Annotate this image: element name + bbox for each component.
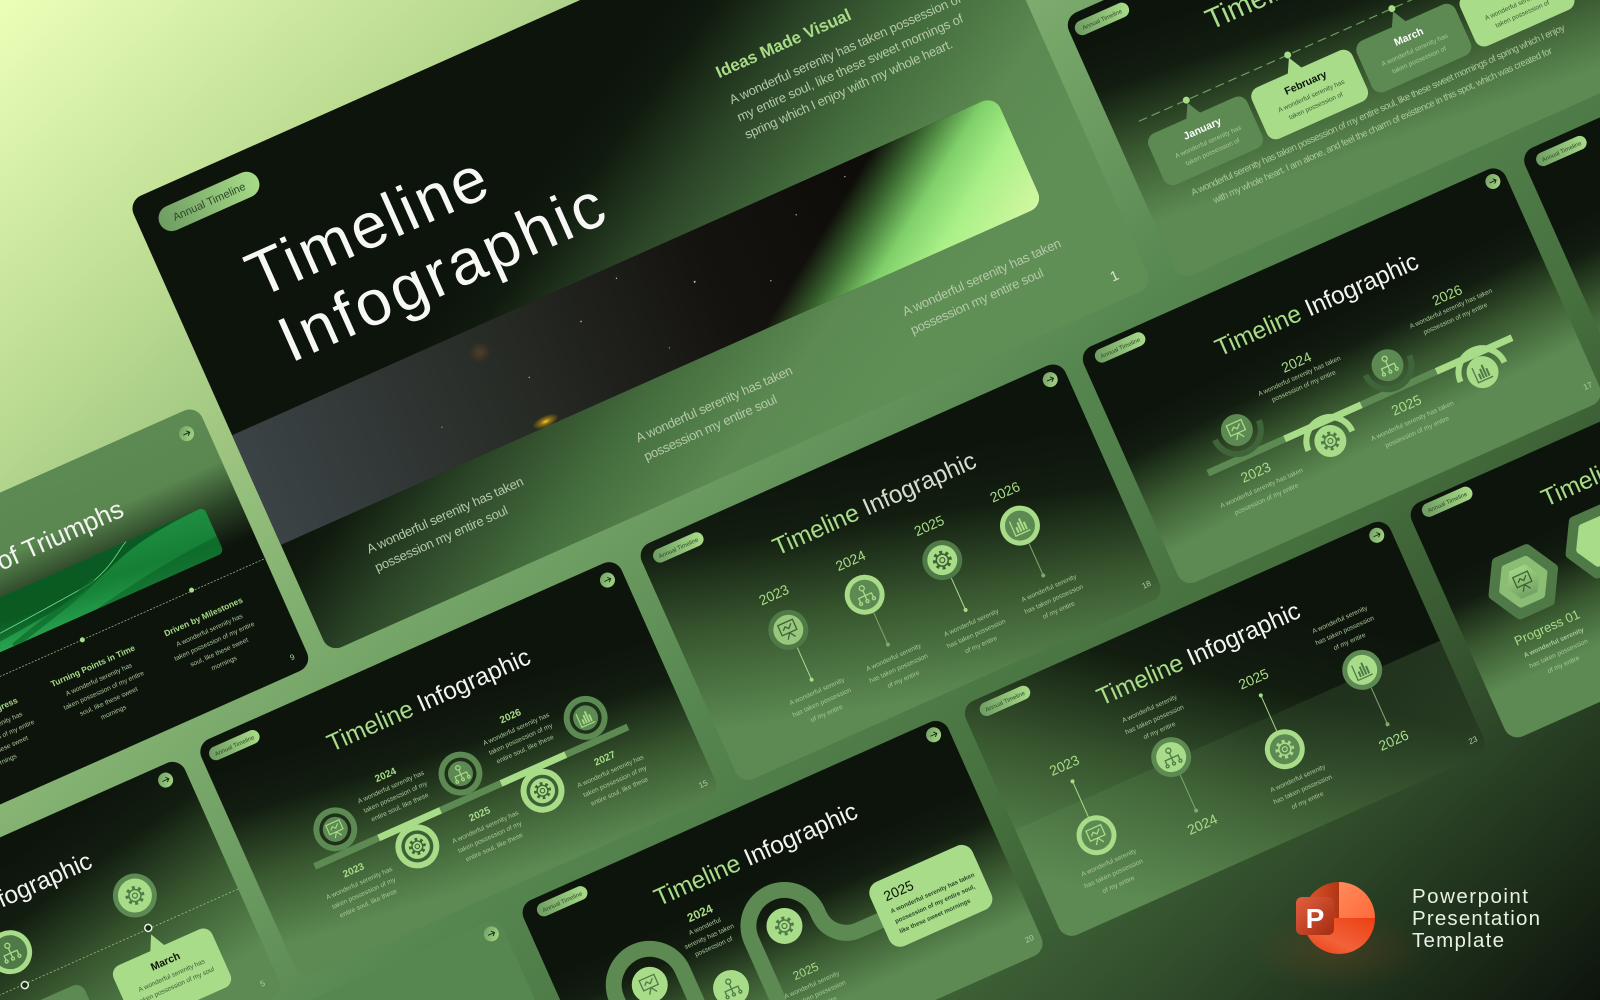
icon: org (707, 964, 755, 1000)
paragraph: A wonderful serenity has taken possession of my entire soul, like these sweet mornings of spring which I enjoy (1190, 22, 1567, 199)
text 2025: A wonderful serenity (943, 608, 1001, 639)
title: Timeline Infographic (650, 798, 862, 912)
arrow button (156, 770, 176, 790)
icon circle gear (106, 867, 164, 925)
milestone 2023 (306, 800, 364, 858)
text 2023: has taken possession (1083, 858, 1144, 890)
milestone 2024 arch (1299, 409, 1359, 465)
text 2024: of my entire (886, 669, 921, 690)
page number: 15 (697, 778, 710, 790)
label 2024: 2024 (685, 901, 715, 925)
panel: row three left slide (76, 917, 602, 1000)
label 2025: taken possession of my (457, 820, 524, 855)
card: previous month (0, 982, 107, 1000)
pill (207, 728, 262, 762)
template caption: Presentation (1412, 907, 1540, 930)
arrow button (177, 424, 196, 444)
label 2023 (1210, 447, 1309, 521)
template caption: Template (1412, 929, 1504, 952)
callout card 2025: like these sweet mornings (898, 897, 972, 935)
page number: 9 (289, 652, 297, 662)
card: January: January (1182, 115, 1223, 143)
node 2025: 2025 (1236, 665, 1271, 692)
panel: far right slide (1520, 0, 1600, 389)
text 2026: of my entire (1042, 600, 1076, 621)
ideas paragraph: spring which I enjoy with my whole heart. (742, 36, 955, 142)
second hexagon (1560, 502, 1600, 579)
text 2024: has taken possession (1124, 704, 1185, 736)
text 2023 (1079, 847, 1149, 901)
winding track (602, 852, 930, 1000)
page number: 18 (1141, 579, 1153, 591)
text 2025 (941, 607, 1012, 661)
panel: slide 20 winding path (518, 716, 1049, 1000)
node 2024: 2024 (1185, 811, 1220, 838)
card: March (1347, 0, 1475, 96)
panel: progress slide (1406, 320, 1600, 742)
caption 2: possession my entire soul (641, 391, 779, 464)
label 2027: entire soul, like these (590, 776, 650, 808)
node 2023 (751, 580, 830, 690)
text 2024 (863, 642, 934, 696)
text 2026 (1310, 604, 1381, 658)
category pill: Annual Timeline (171, 181, 248, 224)
main title: Infographic (267, 168, 615, 376)
dashed line (1137, 0, 1586, 124)
arrow button (598, 570, 617, 590)
column: milestones (161, 594, 266, 685)
node 2023: 2023 (1047, 752, 1082, 779)
node 2024 (1145, 731, 1223, 840)
arrow button (1483, 172, 1503, 191)
progress text: A wonderful serenity (1523, 627, 1585, 659)
lighter lower band (1015, 641, 1489, 940)
pill (535, 884, 590, 919)
page number: 5 (259, 979, 267, 989)
node 2026 (1336, 643, 1415, 756)
text 2026: A wonderful serenity (1021, 573, 1078, 604)
column: turning points: A wonderful serenity has (65, 662, 134, 698)
text 2024: has taken possession (868, 653, 929, 685)
pill: Annual Timeline (542, 891, 584, 914)
title: Timeline Infographic (1211, 248, 1423, 362)
main title: Timeline (235, 141, 498, 311)
arrow button (924, 725, 943, 745)
caption 1: possession my entire soul (372, 502, 510, 575)
dashed timeline (0, 885, 240, 1000)
column: turning points: Turning Points in Time (49, 643, 137, 689)
panel: slide 5 months (0, 757, 285, 1000)
text 2023: has taken possession (792, 687, 853, 719)
text 2024 (1119, 693, 1190, 747)
panel: slide 9 triumphs (0, 410, 308, 804)
card: February: February (1283, 68, 1329, 98)
progress text (1523, 627, 1595, 681)
text 2025: A wonderful serenity (1269, 763, 1327, 794)
label 2024: serenity has taken (684, 923, 736, 951)
label 2023: taken possession of my (331, 876, 398, 911)
text 2023 (787, 676, 858, 730)
label 2024: 2024 (1279, 348, 1314, 376)
caption 3: A wonderful serenity has taken (900, 235, 1063, 319)
milestone 2026 arch (1451, 340, 1511, 397)
milestone 2025 bowl (1359, 341, 1419, 397)
node 2026: 2026 (987, 478, 1023, 505)
caption 3: possession my entire soul (908, 265, 1046, 337)
ideas heading: Ideas Made Visual (713, 5, 854, 82)
label 2024: A wonderful serenity has taken (1257, 355, 1342, 398)
pill (1420, 484, 1475, 519)
column: turning points (49, 643, 157, 735)
milestone 2025 (431, 745, 490, 803)
label 2026: possession of my entire (1423, 302, 1489, 336)
card: February: taken possession of (1288, 91, 1344, 121)
label 2027: 2027 (593, 749, 618, 769)
dotted timeline (0, 555, 266, 746)
column: milestones: soul, like these sweet (189, 637, 250, 669)
label 2025: entire soul, like these (465, 832, 525, 863)
label 2026: entire soul, like these (496, 734, 555, 765)
progress text: has taken possession (1528, 638, 1589, 670)
icon: PowerPoint logo (1296, 882, 1375, 954)
pill (651, 530, 706, 565)
card: March: A wonderful serenity has (138, 958, 207, 994)
pill: Annual Timeline (985, 691, 1027, 714)
label 2027: A wonderful serenity has (576, 754, 646, 790)
pill (1093, 330, 1148, 365)
text 2026: A wonderful serenity (1312, 605, 1369, 635)
panel: slide 18 stems timeline (636, 360, 1165, 784)
pill (1072, 0, 1132, 38)
card: February: A wonderful serenity has (1277, 78, 1346, 114)
node 2025 (1232, 663, 1311, 776)
label 2025: A wonderful serenity (783, 970, 841, 1000)
label 2025: A wonderful serenity has taken (1370, 400, 1455, 443)
label 2025: A wonderful serenity has (451, 809, 520, 845)
milestone 2027 (557, 689, 615, 747)
label 2023: 2023 (1238, 458, 1273, 486)
node 2026 (983, 476, 1061, 586)
callout card 2025: 2025 (881, 877, 916, 904)
label 2026 (1401, 270, 1498, 340)
card: March (104, 912, 234, 1000)
label 2023: A wonderful serenity has taken (1219, 467, 1305, 510)
label 2027: taken possession of my (582, 764, 649, 799)
label 2026: 2026 (498, 707, 523, 726)
callout card 2025: possession of my entire soul, (894, 883, 977, 925)
icon circle org (0, 923, 39, 981)
column: turning points: soul, like these sweet (79, 686, 139, 718)
label 2024: entire soul, like these (370, 792, 430, 823)
icon: board (626, 961, 674, 1000)
pill: Annual Timeline (658, 537, 700, 560)
label 2025 (774, 952, 852, 1000)
label 2024: possession of (694, 936, 734, 958)
column: milestones: taken possession of my entire (173, 621, 256, 663)
text 2024: of my entire (1142, 721, 1177, 741)
card: January: taken possession of (1185, 137, 1241, 167)
label 2026: 2026 (1430, 281, 1465, 309)
title: Timeline Infographic (323, 644, 535, 758)
node 2024: 2024 (833, 547, 868, 574)
text 2023: A wonderful serenity (1080, 848, 1138, 878)
text 2023: A wonderful serenity (789, 676, 846, 707)
text 2025: has taken possession (1273, 774, 1334, 806)
label 2026 (476, 697, 560, 767)
node 2025: 2025 (912, 512, 947, 539)
column: milestones: mornings (211, 655, 239, 672)
fabric image (0, 508, 222, 652)
title: Timeline Infographic (1093, 598, 1305, 712)
text 2024: A wonderful serenity (1121, 694, 1179, 724)
label 2025: 2025 (791, 959, 821, 983)
column: turning points: taken possession of my entire (63, 670, 146, 712)
node 2024 (828, 545, 906, 655)
page number: 20 (1024, 933, 1036, 945)
text 2025: of my entire (964, 635, 999, 655)
text 2023: of my entire (1102, 875, 1136, 895)
node 2026: 2026 (1376, 726, 1411, 754)
text 2023: of my entire (810, 704, 844, 724)
label 2026: A wonderful serenity has taken (1409, 287, 1494, 330)
label 2025: 2025 (467, 805, 493, 824)
label 2024 (672, 896, 740, 961)
hexagon icon (1483, 543, 1564, 620)
panel: slide 17 seesaw track (1078, 164, 1600, 588)
card: April (1456, 0, 1578, 50)
label 2024: A wonderful serenity has (357, 769, 426, 805)
card: March: March (1392, 25, 1425, 49)
icon: gear (761, 902, 808, 950)
card: January: A wonderful serenity has (1174, 124, 1243, 160)
label 2023: 2023 (341, 861, 367, 880)
pill: Annual Timeline (1100, 337, 1142, 360)
label 2023: entire soul, like these (339, 888, 398, 920)
text 2025: of my entire (1291, 790, 1325, 811)
label 2024 (1249, 338, 1347, 408)
photo band (218, 96, 1044, 552)
column: milestones: A wonderful serenity has (175, 613, 245, 649)
label 2024: A wonderful (688, 916, 723, 937)
title: Timeline Infographic (769, 447, 980, 561)
column: progress (0, 692, 46, 783)
callout card 2025 (865, 841, 996, 951)
arrow button (1367, 525, 1387, 545)
category pill (154, 168, 264, 235)
text 2026: has taken possession (1315, 615, 1376, 647)
label 2025: possession of my entire (1384, 415, 1451, 450)
label 2024 (351, 756, 435, 825)
segmented track (1206, 334, 1513, 476)
text 2024: A wonderful serenity (865, 642, 923, 673)
card: March: March (149, 950, 182, 974)
card: February (1242, 34, 1371, 142)
label 2024: 2024 (373, 766, 399, 785)
icon: PowerPoint logo: P (1306, 903, 1324, 934)
label 2025: 2025 (1389, 391, 1424, 419)
milestone 2024 (388, 817, 446, 875)
segmented track (313, 724, 629, 870)
arrow button (1040, 370, 1060, 390)
label 2026: taken possession of my (488, 722, 554, 757)
callout card 2025: A wonderful serenity has taken (890, 872, 976, 915)
text 2025: has taken possession (946, 618, 1007, 650)
page number: 23 (1467, 734, 1479, 746)
panel: months timeline slide (1063, 0, 1600, 280)
node 2025 (906, 511, 984, 620)
label 2024: possession of my entire (1271, 369, 1337, 404)
milestone 2023 bowl (1208, 406, 1269, 462)
card: March: taken possession of (1391, 45, 1447, 76)
text 2026: has taken possession (1024, 583, 1085, 616)
node 2023: 2023 (756, 581, 791, 608)
caption 1: A wonderful serenity has taken (364, 474, 526, 556)
label 2027 (570, 739, 655, 810)
ideas paragraph: my entire soul, like these sweet mornings of (735, 11, 966, 125)
orange glow (1248, 910, 1428, 990)
text 2026 (1019, 572, 1090, 627)
panel: main title slide (114, 0, 1153, 659)
panel: slide 23 alternating timeline (960, 517, 1489, 940)
pill: Annual Timeline (1082, 9, 1124, 32)
page number: 17 (1582, 380, 1594, 392)
text 2026: of my entire (1333, 632, 1367, 652)
paragraph: with my whole heart. I am alone, and feel the charm of existence in this spot, which was created for (1211, 46, 1554, 207)
pill (1534, 134, 1589, 168)
pill: Annual Timeline (214, 735, 256, 758)
label 2024: taken possession of my (363, 780, 429, 815)
panel: slide 15 five-year track (196, 558, 721, 980)
template caption (1412, 885, 1540, 952)
text 2025 (1268, 763, 1338, 817)
card: January (1139, 81, 1266, 188)
column: milestones: Driven by Milestones (162, 595, 244, 638)
main title (235, 102, 615, 377)
label 2025 (445, 795, 529, 865)
arrow button (481, 924, 501, 944)
label 2025 (1361, 380, 1460, 454)
label 2023 (319, 851, 403, 922)
page number: 1 (1108, 267, 1121, 284)
template caption: Powerpoint (1412, 885, 1528, 908)
progress heading: Progress 01 (1512, 606, 1582, 649)
label 2023: A wonderful serenity has (325, 866, 394, 901)
milestone 2026 (513, 762, 572, 820)
label 2023: possession of my entire (1234, 482, 1300, 517)
caption 2: A wonderful serenity has taken (633, 363, 795, 445)
pill: Annual Timeline (1427, 491, 1469, 515)
column: turning points: mornings (100, 704, 128, 722)
card: March: A wonderful serenity has (1381, 32, 1450, 68)
pill: Annual Timeline (1541, 141, 1583, 164)
progress text: of my entire (1547, 655, 1581, 675)
card: April: taken possession of (1494, 0, 1551, 30)
label 2026: A wonderful serenity has (482, 711, 551, 747)
node 2023 (1044, 749, 1123, 862)
pill (977, 683, 1032, 718)
